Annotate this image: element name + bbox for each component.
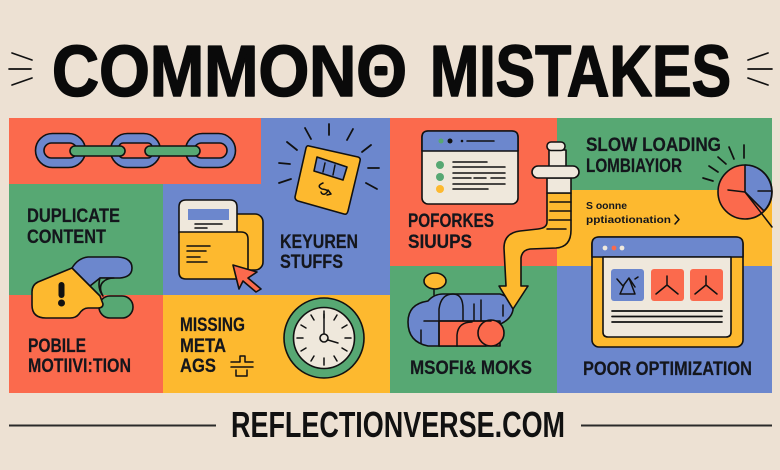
heading: mobile: POBILE	[28, 336, 86, 357]
panel: missing meta tags	[163, 295, 390, 393]
left title sparks	[9, 53, 32, 85]
heading: duplicate content	[27, 206, 120, 248]
panel: slow loading	[557, 118, 772, 190]
heading: duplicate content: DUPLICATE	[27, 206, 120, 227]
footer url: REFLECTIONVERSE.COM	[231, 404, 565, 445]
heading: slow loading: SLOW LOADING	[586, 135, 721, 156]
icon: funnel pipe with arrow	[499, 142, 579, 309]
title	[52, 32, 731, 112]
text: optimisation note	[586, 201, 679, 226]
heading: keyword stuffs: STUFFS	[280, 252, 343, 273]
panel: popups	[390, 118, 557, 266]
heading: duplicate content: CONTENT	[27, 227, 106, 248]
right title sparks	[748, 53, 772, 85]
panel: broken links	[9, 118, 261, 184]
panel: poor optimization	[557, 237, 772, 393]
icon: browser window	[422, 131, 518, 204]
heading: keyword stuffs: KEYUREN	[280, 232, 358, 253]
footer rule left	[9, 424, 216, 426]
heading: missing meta tags: AGS	[180, 356, 216, 377]
icon: tag symbol	[231, 356, 253, 376]
heading: missing meta tags: META	[180, 336, 226, 357]
heading: mobile: MOTIIVI:TION	[28, 356, 131, 377]
icon: optimisation window	[592, 237, 743, 347]
panel: keyword stuffing	[163, 118, 390, 295]
panel: mobile	[9, 295, 163, 393]
heading: popups	[408, 211, 494, 253]
heading: popups: POFORKES	[408, 211, 494, 232]
icon: clock	[284, 298, 364, 378]
icon: chain	[36, 134, 236, 168]
icon: folder with cursor	[179, 200, 263, 292]
heading: popups: SIUUPS	[408, 232, 472, 253]
footer rule right	[581, 424, 772, 426]
icon: machine	[408, 273, 513, 346]
heading: keyword stuffs	[280, 232, 358, 273]
icon: pie chart with rays	[703, 145, 772, 227]
panel: memos	[390, 266, 557, 393]
heading: mobile	[28, 336, 131, 377]
panel: speed optimisation	[557, 190, 772, 266]
title: COMMONO	[52, 32, 407, 112]
heading: slow loading: LOMBIAYIOR	[586, 156, 682, 177]
heading: slow loading	[586, 135, 721, 177]
heading: missing meta tags: MISSING	[180, 315, 245, 336]
icon: tilted card with rays	[279, 124, 379, 214]
icon: mobile warning blob	[32, 257, 133, 318]
heading: missing meta tags	[180, 315, 245, 377]
panel: duplicate content	[9, 184, 163, 295]
text: optimisation note: S oonne	[586, 201, 627, 212]
heading: memos: MSOFI& MOKS	[410, 358, 532, 379]
heading: poor optimization: POOR OPTIMIZATION	[583, 359, 752, 380]
text: optimisation note: pptiaotionation	[586, 215, 671, 226]
